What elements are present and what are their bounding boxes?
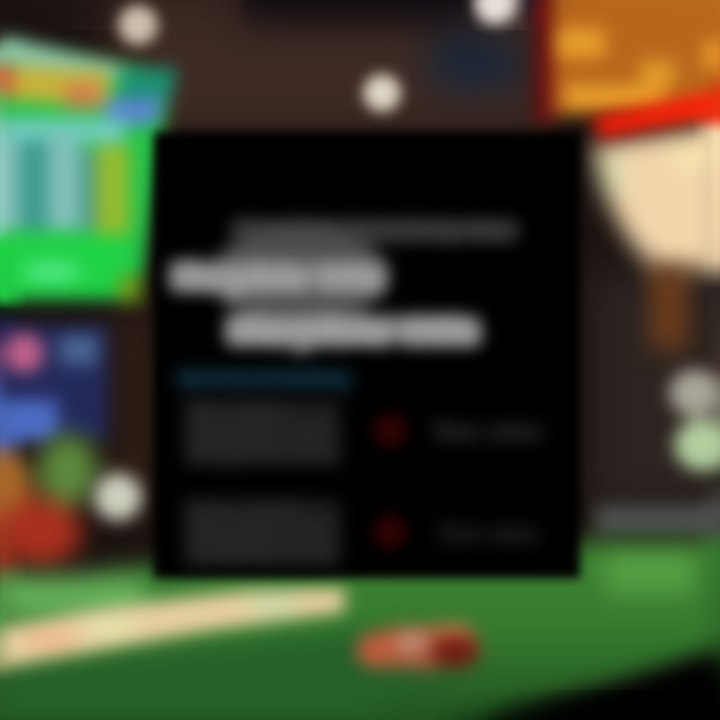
right side ornaments	[595, 369, 720, 535]
lamp stem	[650, 265, 688, 350]
title line 1: Illegible heading text	[230, 217, 521, 245]
dark table corner	[480, 650, 720, 720]
panel: central dark card	[154, 132, 580, 578]
section heading: Section heading	[176, 363, 351, 394]
text block: row 1 right: Row value	[434, 416, 542, 446]
right neon sign	[535, 0, 720, 125]
title glow	[172, 220, 515, 344]
text block: row 2 right: Row value	[440, 518, 538, 548]
white sphere	[94, 473, 142, 521]
text block: row 2 left: Illegible line	[185, 517, 340, 544]
text block: row 2 left: Illegible line	[185, 539, 340, 566]
icon: red marker row 1	[373, 413, 407, 447]
text block: row 1 left: Row label	[185, 395, 285, 422]
title line 3: Illegible title	[225, 310, 483, 354]
background: back wall and ceiling	[0, 0, 720, 510]
text block: row 1 left: Illegible line	[185, 417, 340, 444]
ceiling lights	[118, 0, 515, 112]
red sign band	[592, 90, 720, 138]
text block: row 1 left	[185, 395, 340, 466]
icon: red marker row 2	[373, 515, 407, 549]
title line 2: Illegible title	[170, 256, 385, 300]
text block: row 2 left: Row label	[185, 495, 300, 522]
title	[170, 217, 521, 354]
stacked chips and plant	[0, 434, 98, 566]
text block: row 2 left	[185, 495, 340, 566]
table edge stripe	[0, 588, 345, 668]
chips on table	[356, 624, 482, 669]
right globe lamp	[592, 125, 720, 275]
left slot machine: lower screen	[0, 325, 108, 442]
green table felt	[0, 540, 720, 720]
text block: row 1 left: Illegible line	[185, 439, 340, 466]
left slot machine: upper screen	[0, 35, 178, 303]
